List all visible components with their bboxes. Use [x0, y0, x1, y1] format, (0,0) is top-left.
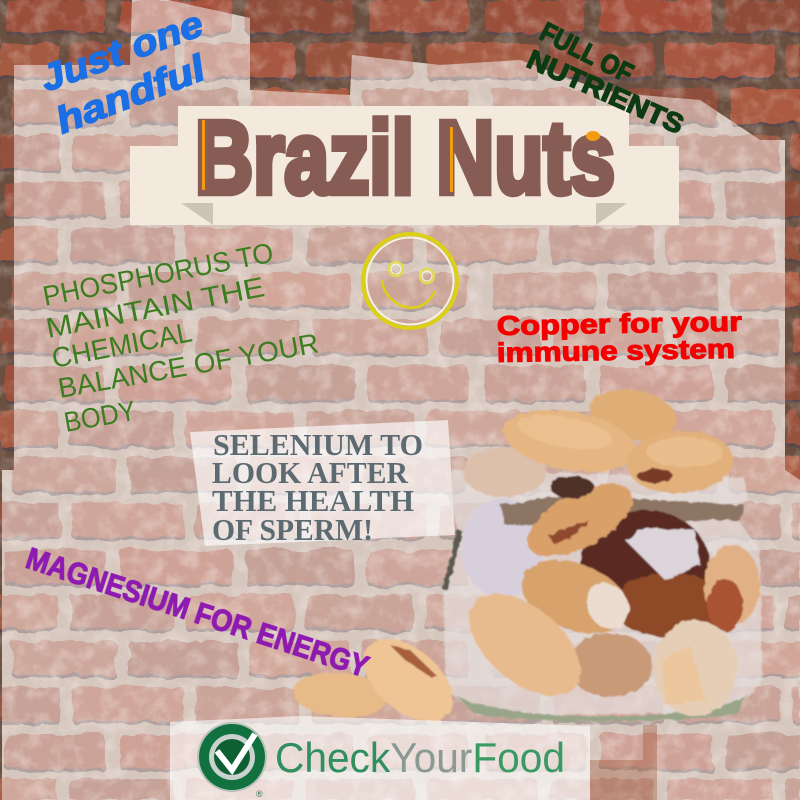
middle nut spot: [548, 520, 590, 545]
big lower nut: [451, 574, 599, 716]
jar glass: [443, 470, 762, 716]
banner fold right: [596, 203, 627, 225]
orange brown nut: [612, 573, 728, 637]
lower right pale nut: [653, 620, 737, 716]
top small nut: [585, 383, 681, 447]
heading: full of nutrients: [523, 17, 688, 140]
background: exposed brick strip near logo: [590, 725, 657, 800]
smiley icon: [363, 234, 457, 328]
icon: check logo: [197, 722, 267, 792]
registered mark: ®: [256, 789, 263, 799]
title accent: s dot: [586, 131, 600, 141]
neck shadow: [500, 495, 745, 525]
heading: full of nutrients: NUTRIENTS: [523, 44, 688, 140]
loose nut right: [348, 623, 468, 737]
selenium text: OF SPERM!: [212, 512, 373, 547]
illustration: jar of brazil nuts: [291, 383, 762, 737]
logo wordmark: CheckYourFood: [275, 734, 565, 781]
banner: [130, 100, 679, 225]
lower right nut: [568, 633, 652, 697]
heading: just one handful: Just one: [35, 3, 208, 100]
top big nut highlight: [515, 409, 615, 455]
heading: full of nutrients: FULL OF: [535, 17, 638, 89]
text: phosphorus: BALANCE OF YOUR: [56, 328, 321, 404]
text: copper: Copper for your: [497, 307, 743, 341]
lower nut piece: [662, 645, 705, 705]
title accent: B bar: [202, 120, 205, 190]
text: phosphorus: MAINTAIN THE: [43, 271, 267, 344]
banner fold left: [181, 203, 213, 225]
selenium text: THE HEALTH: [212, 483, 414, 518]
heading: just one handful: [35, 3, 211, 141]
back nut left: [463, 447, 547, 497]
top big nut: [499, 401, 641, 481]
text: copper: immune system: [497, 334, 735, 368]
white highlight: [625, 528, 700, 580]
selenium text: LOOK AFTER: [212, 455, 409, 490]
middle nut: [516, 469, 644, 571]
text: copper: [497, 307, 743, 368]
jar base: [455, 695, 748, 722]
top right nut highlight: [647, 437, 723, 467]
centre nut pale end: [579, 575, 637, 637]
heading: just one handful: handful: [50, 47, 211, 141]
left glass highlight: [461, 498, 545, 598]
centre nut: [511, 547, 639, 647]
loose nut left: [291, 669, 389, 721]
text: phosphorus: PHOSPHORUS TO: [40, 237, 276, 312]
selenium text: SELENIUM TO: [213, 427, 423, 462]
right nut skin: [707, 579, 743, 631]
banner top panel: [178, 106, 629, 203]
text: phosphorus: BODY: [62, 395, 138, 438]
top right nut spot: [637, 469, 673, 483]
right nut: [704, 545, 760, 625]
title: Brazil Nuts: [195, 100, 615, 215]
panel: selenium: [190, 420, 455, 547]
title accent: N bar: [450, 127, 453, 192]
top right nut: [625, 427, 735, 497]
dark glass edge: [445, 530, 460, 590]
text: magnesium: MAGNESIUM FOR ENERGY: [22, 540, 373, 684]
dark core: [580, 510, 710, 620]
selenium text: [212, 427, 423, 547]
text: phosphorus: CHEMICAL: [49, 316, 195, 374]
loose nut streak: [390, 645, 436, 678]
banner band: [130, 146, 679, 225]
text: phosphorus: [40, 237, 321, 438]
dark spot: [550, 476, 594, 498]
panel: logo: [170, 716, 590, 800]
